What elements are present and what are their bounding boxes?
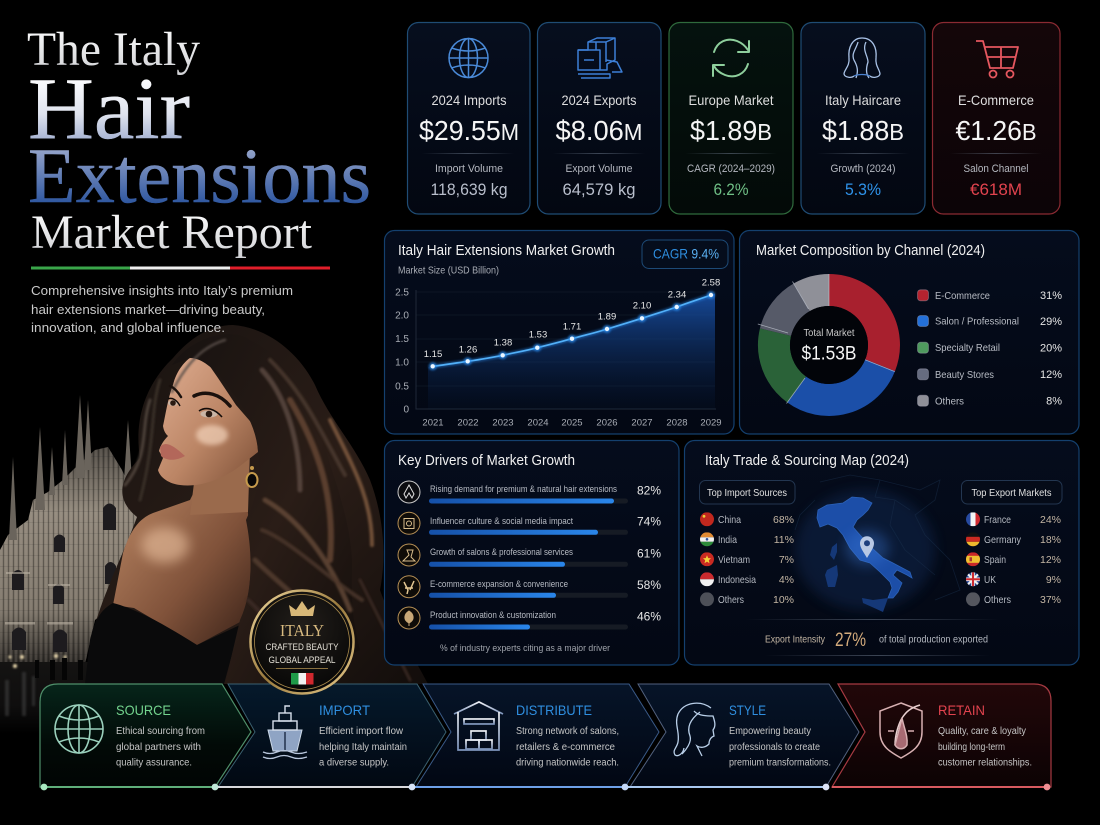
step: distribute	[412, 684, 659, 787]
export list: France	[984, 514, 1011, 526]
step: distribute: Strong network of salons,	[516, 726, 619, 737]
flag: indonesia	[700, 572, 714, 586]
badge: italy medallion: CRAFTED BEAUTY	[266, 642, 339, 653]
legend: 29%	[1040, 316, 1062, 328]
panel: market growth chart	[384, 230, 734, 434]
import list: 10%	[773, 594, 794, 606]
line chart: 2021	[422, 418, 444, 428]
step: retain: building long-term	[938, 742, 1005, 753]
legend: 31%	[1040, 290, 1062, 302]
heading: Market Composition by Channel (2024)	[756, 243, 985, 259]
import sources heading	[700, 480, 795, 504]
step: source: quality assurance.	[116, 758, 192, 768]
legend: Specialty Retail	[935, 342, 1000, 354]
line chart: 1.38	[494, 338, 512, 348]
step: retain: customer relationships.	[938, 758, 1032, 768]
black dress	[85, 603, 240, 684]
export list: Germany	[984, 534, 1022, 546]
heading: Key Drivers of Market Growth	[398, 453, 575, 469]
intro paragraph: Comprehensive insights into Italy’s premium	[31, 284, 293, 298]
card: 2024 exports	[538, 22, 661, 214]
import list	[700, 512, 794, 606]
card: 2024 imports	[408, 22, 530, 214]
export list: Others	[984, 594, 1011, 606]
driver 3: 61%	[637, 546, 661, 560]
cagr badge	[642, 240, 728, 268]
driver 4: E-commerce expansion & convenience	[430, 579, 568, 590]
export list: 37%	[1040, 594, 1061, 606]
flag: spain	[966, 552, 980, 566]
panel: kpi cards	[408, 22, 1060, 214]
line chart: 2.34	[668, 290, 686, 300]
import list: Indonesia	[718, 574, 756, 586]
icon: italian flag	[291, 673, 314, 684]
step: source: Ethical sourcing from	[116, 726, 205, 737]
driver 5: 46%	[637, 610, 661, 624]
line chart: 1.71	[563, 322, 581, 332]
step: retain: Quality, care & loyalty	[938, 726, 1026, 737]
card: italy haircare	[801, 22, 925, 214]
driver 3: Growth of salons & professional services	[430, 547, 573, 558]
badge: italy medallion	[250, 590, 354, 694]
legend: E-Commerce	[935, 290, 990, 302]
process flow	[40, 684, 1051, 790]
icon: shield with hair follicle	[880, 703, 922, 758]
legend	[918, 290, 1062, 408]
export list	[966, 512, 1061, 606]
title: Hair	[28, 61, 190, 158]
card: europe market: $1.89B	[690, 115, 772, 146]
export list: UK	[984, 574, 996, 586]
donut chart: Total Market	[804, 327, 855, 339]
eyes	[168, 398, 222, 418]
line chart: 0.5	[395, 382, 409, 392]
import list: 68%	[773, 514, 794, 526]
line chart: 1.53	[529, 330, 547, 340]
line chart	[395, 278, 722, 428]
import list: India	[718, 534, 737, 546]
heading: Italy Hair Extensions Market Growth	[398, 243, 615, 259]
driver 4: 58%	[637, 578, 661, 592]
card: italy haircare: Italy Haircare	[825, 92, 901, 108]
panel: key drivers	[384, 440, 679, 665]
face	[158, 352, 258, 486]
illustration: milan cathedral	[0, 395, 140, 734]
import list: China	[718, 514, 741, 526]
footnote: % of industry experts citing as a major driver	[440, 643, 610, 654]
card: italy haircare: Growth (2024)	[830, 163, 896, 175]
card: e-commerce: Salon Channel	[964, 163, 1028, 175]
line chart: 2.5	[395, 288, 409, 298]
driver 1: 82%	[637, 484, 661, 498]
export list: 9%	[1046, 574, 1061, 586]
step: retain: RETAIN	[938, 702, 985, 718]
flag: uk	[966, 572, 980, 586]
export list: 24%	[1040, 514, 1061, 526]
export intensity callout	[765, 630, 988, 651]
import sources heading: Top Import Sources	[707, 487, 787, 499]
illustration: woman with long hair	[85, 325, 428, 684]
card: 2024 imports: 118,639 kg	[430, 181, 508, 199]
step: import: helping Italy maintain	[319, 742, 407, 753]
card: italy haircare: 5.3%	[845, 181, 881, 199]
export list: 12%	[1040, 554, 1061, 566]
line chart: 1.0	[395, 358, 409, 368]
back and shoulder	[113, 470, 251, 645]
badge: italy medallion: ITALY	[280, 621, 324, 640]
hair highlights	[125, 340, 410, 680]
card: 2024 imports: Import Volume	[435, 163, 503, 175]
flag: others	[700, 592, 714, 606]
flag: vietnam	[700, 552, 714, 566]
driver 2: Influencer culture & social media impact	[430, 516, 573, 527]
line chart: 1.5	[395, 334, 409, 345]
line chart: 1.26	[459, 344, 477, 356]
card: 2024 imports: $29.55M	[419, 115, 519, 146]
flag: india	[700, 532, 714, 547]
step: source	[40, 684, 251, 787]
title: Market Report	[31, 206, 313, 259]
flow nodes	[41, 784, 1050, 790]
card: 2024 imports: 2024 Imports	[432, 92, 506, 108]
line chart: 2028	[666, 418, 688, 428]
title: Extensions	[28, 132, 371, 219]
card: italy haircare: $1.88B	[822, 115, 904, 146]
driver 2	[398, 512, 661, 535]
step: style: STYLE	[729, 702, 766, 718]
legend: 20%	[1040, 342, 1062, 354]
card: e-commerce	[932, 22, 1060, 214]
lips	[160, 444, 185, 460]
import list: 7%	[779, 554, 794, 566]
driver 1	[398, 481, 661, 504]
step: style	[628, 684, 859, 787]
driver 1: Rising demand for premium & natural hair extensions	[430, 484, 617, 495]
card: europe market: 6.2%	[714, 181, 749, 199]
axis subtitle: Market Size (USD Billion)	[398, 264, 499, 276]
badge: italy medallion: GLOBAL APPEAL	[268, 655, 336, 666]
export list: 18%	[1040, 534, 1061, 546]
import list: Others	[718, 594, 744, 606]
card: 2024 exports: Export Volume	[566, 163, 632, 175]
card: e-commerce: €1.26B	[956, 115, 1036, 146]
card: 2024 exports: 2024 Exports	[562, 92, 636, 108]
panel: market composition	[740, 230, 1079, 434]
export list: Spain	[984, 554, 1006, 566]
flag: others	[966, 592, 980, 606]
line chart: 2029	[700, 418, 722, 428]
donut chart	[758, 274, 895, 404]
intro paragraph: innovation, and global influence.	[31, 321, 225, 335]
heading: Italy Trade & Sourcing Map (2024)	[705, 453, 909, 469]
step: import: Efficient import flow	[319, 726, 404, 737]
driver 3	[398, 544, 661, 567]
icon: cargo ship	[263, 706, 307, 758]
intro paragraph	[31, 284, 293, 335]
step: style: premium transformations.	[729, 758, 831, 768]
line chart: 2.10	[633, 300, 651, 312]
earring	[246, 466, 258, 487]
line chart: 1.89	[598, 312, 616, 322]
driver 4	[398, 576, 661, 598]
legend: Beauty Stores	[935, 369, 994, 381]
legend: 12%	[1040, 369, 1062, 381]
import list: 4%	[779, 574, 794, 586]
step: retain	[832, 684, 1051, 787]
italian tricolor rule	[31, 266, 330, 270]
flag: germany	[966, 532, 980, 547]
line chart: 2026	[596, 418, 618, 428]
export intensity callout: 27%	[835, 630, 866, 651]
line chart: 2023	[492, 418, 514, 428]
title	[27, 23, 371, 259]
line chart: 2024	[527, 418, 549, 428]
driver 5	[398, 607, 661, 630]
card: 2024 exports: 64,579 kg	[562, 181, 636, 199]
line chart: 2027	[631, 418, 653, 428]
step: distribute: driving nationwide reach.	[516, 758, 619, 768]
step: distribute: DISTRIBUTE	[516, 702, 592, 718]
legend: 8%	[1046, 396, 1062, 408]
neck	[190, 450, 250, 515]
icon: refresh arrows	[713, 40, 749, 76]
icon: warehouse	[454, 702, 503, 751]
step: style: Empowering beauty	[729, 726, 811, 737]
driver 2: 74%	[637, 514, 661, 528]
line chart: 0	[403, 404, 409, 416]
panel: trade and sourcing map	[684, 440, 1079, 665]
step: source: global partners with	[116, 742, 201, 753]
donut chart: $1.53B	[802, 344, 856, 364]
flag: china	[700, 512, 714, 526]
title: The Italy	[27, 23, 200, 76]
import list: Vietnam	[718, 554, 750, 566]
cagr badge: CAGR 9.4%	[653, 246, 719, 262]
export intensity callout: Export Intensity	[765, 634, 826, 646]
icon: packages on pallet	[578, 38, 622, 78]
step: import: a diverse supply.	[319, 758, 389, 768]
step: import: IMPORT	[319, 702, 370, 718]
card: europe market: Europe Market	[688, 92, 774, 108]
line chart: 2022	[457, 418, 479, 428]
icon: globe	[449, 38, 488, 78]
legend: Others	[935, 396, 964, 408]
hair mass	[95, 325, 428, 684]
line chart: 2025	[561, 418, 583, 428]
step: distribute: retailers & e-commerce	[516, 742, 615, 753]
hair over forehead and right side	[172, 334, 360, 684]
export intensity callout: of total production exported	[879, 634, 988, 646]
step: import	[215, 684, 446, 787]
icon: globe	[55, 705, 103, 753]
card: 2024 exports: $8.06M	[556, 115, 642, 146]
import list: 11%	[774, 534, 794, 546]
icon: hair silhouette	[844, 38, 880, 78]
card: europe market	[669, 22, 793, 214]
export markets heading	[962, 480, 1062, 504]
cheek highlight	[196, 425, 228, 445]
icon: shopping cart	[976, 41, 1018, 78]
step: style: professionals to create	[729, 742, 820, 753]
line chart: 2.0	[395, 310, 409, 322]
intro paragraph: hair extensions market—driving beauty,	[31, 303, 265, 317]
legend: Salon / Professional	[935, 316, 1019, 328]
export markets heading: Top Export Markets	[972, 487, 1052, 499]
shoulder highlight	[141, 527, 189, 563]
card: europe market: CAGR (2024–2029)	[687, 163, 775, 175]
icon: woman profile	[674, 703, 715, 756]
line chart: 2.58	[702, 278, 720, 288]
eyebrows	[170, 386, 230, 406]
line chart: 1.15	[424, 349, 442, 360]
driver 5: Product innovation & customization	[430, 610, 556, 621]
flag: france	[966, 512, 980, 526]
step: source: SOURCE	[116, 702, 171, 718]
card: e-commerce: €618M	[970, 181, 1022, 199]
card: e-commerce: E-Commerce	[958, 92, 1034, 108]
map of italy	[795, 475, 960, 612]
icon: crown	[289, 601, 315, 616]
icon: location pin	[860, 536, 874, 558]
